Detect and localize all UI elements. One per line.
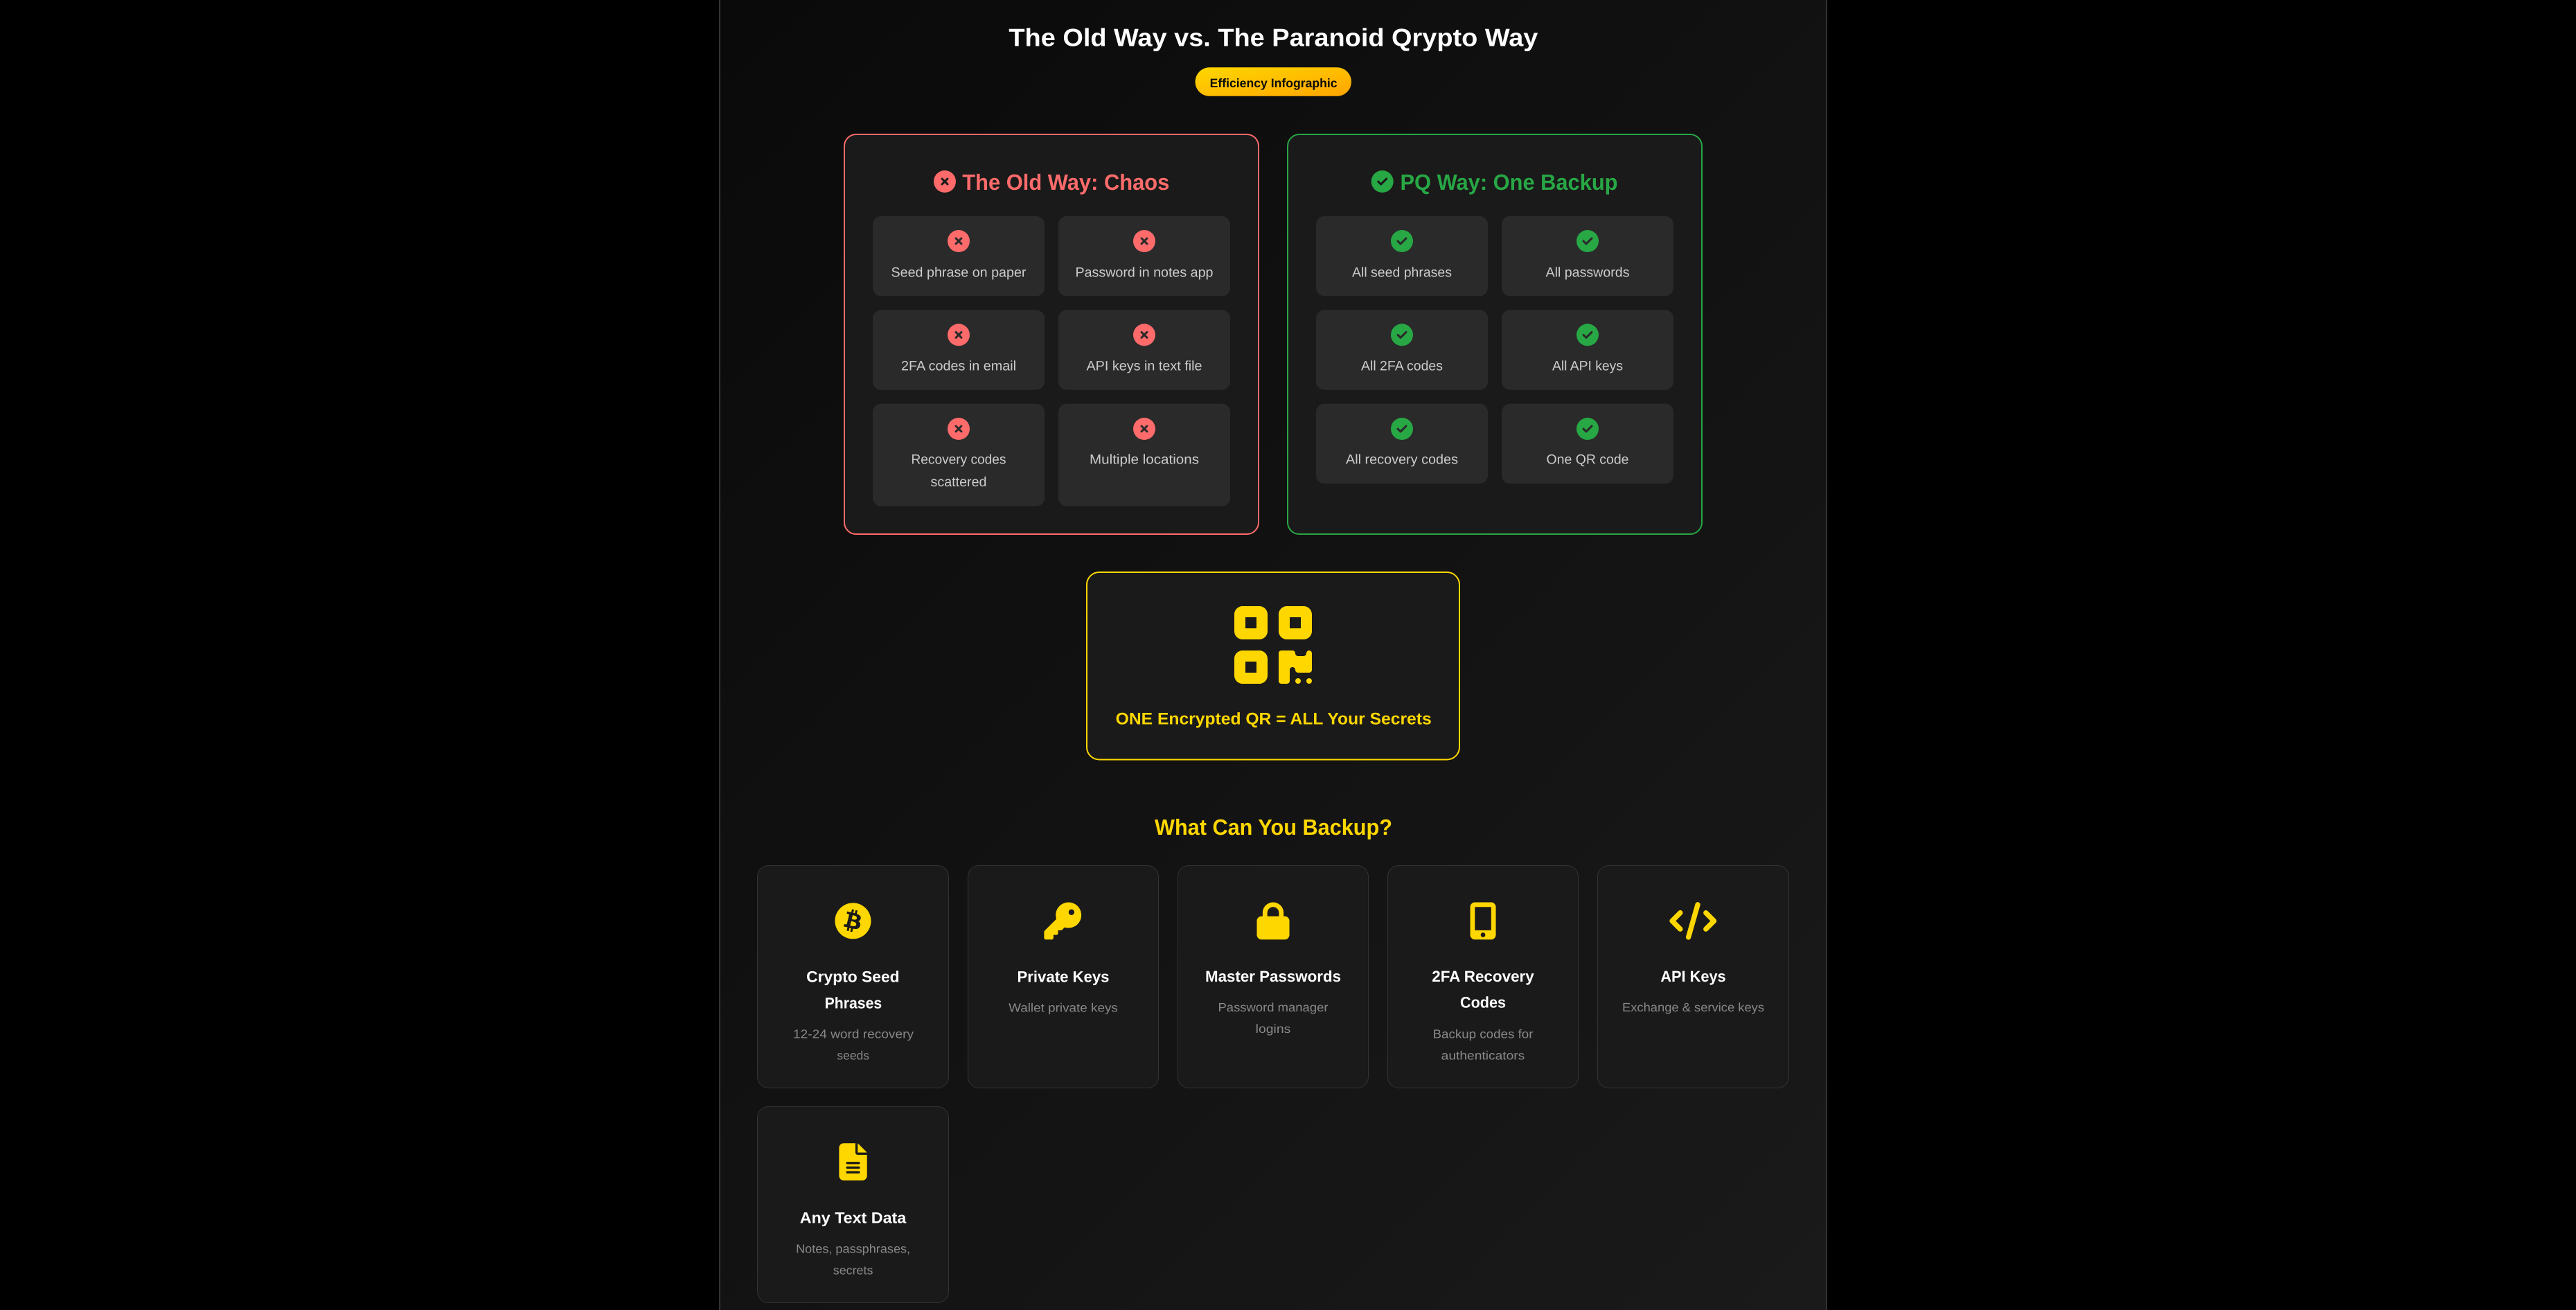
card description: Exchange & service keys bbox=[1622, 1000, 1764, 1014]
item: all 2fa codes bbox=[1316, 310, 1488, 390]
card title bbox=[1432, 968, 1534, 1011]
section heading: what can you backup: What Can You Backup? bbox=[1155, 815, 1392, 840]
item: all recovery codes: All recovery codes bbox=[1346, 452, 1458, 467]
card: crypto seed phrases bbox=[758, 866, 949, 1088]
item: all passwords: All passwords bbox=[1546, 265, 1630, 280]
card title: Any Text Data bbox=[800, 1209, 907, 1226]
card description bbox=[1218, 1000, 1329, 1036]
item: recovery codes scattered: scattered bbox=[931, 475, 986, 490]
item: one qr code bbox=[1502, 404, 1673, 484]
card description: 12-24 word recovery bbox=[793, 1027, 914, 1041]
card: 2fa recovery codes bbox=[1388, 866, 1578, 1088]
card description: Backup codes for bbox=[1432, 1027, 1534, 1041]
icon: code brackets bbox=[1670, 902, 1716, 939]
heading: the old way: The Old Way: Chaos bbox=[962, 170, 1169, 195]
card title bbox=[806, 968, 900, 1011]
card title: 2FA Recovery bbox=[1432, 968, 1534, 985]
card: api keys bbox=[1597, 866, 1788, 1088]
icon: bitcoin bbox=[835, 903, 871, 939]
card title: Codes bbox=[1460, 993, 1506, 1011]
item: all 2fa codes: All 2FA codes bbox=[1361, 358, 1443, 373]
card description bbox=[796, 1242, 910, 1277]
panel: pq way bbox=[1288, 134, 1702, 534]
item: all passwords bbox=[1502, 216, 1673, 296]
page background bbox=[719, 0, 1827, 1310]
card description: seeds bbox=[837, 1048, 869, 1062]
icon: mobile phone bbox=[1471, 902, 1496, 939]
card description bbox=[1432, 1027, 1534, 1062]
item: recovery codes scattered: Recovery codes bbox=[912, 452, 1006, 467]
item: all api keys bbox=[1502, 310, 1673, 390]
card description: secrets bbox=[833, 1264, 873, 1277]
card title: API Keys bbox=[1660, 968, 1726, 985]
item: one qr code: One QR code bbox=[1546, 452, 1629, 467]
icon: qr code bbox=[1234, 606, 1312, 684]
card description: Notes, passphrases, bbox=[796, 1242, 910, 1256]
badge: Efficiency Infographic bbox=[1196, 67, 1351, 96]
card title: Private Keys bbox=[1017, 968, 1110, 985]
heading: pq way: PQ Way: One Backup bbox=[1401, 170, 1618, 195]
badge: Efficiency Infographic: Efficiency Infographic bbox=[1210, 76, 1338, 90]
item: seed phrase on paper bbox=[873, 216, 1045, 296]
card: master passwords bbox=[1178, 866, 1369, 1088]
item: all seed phrases: All seed phrases bbox=[1352, 265, 1452, 280]
item: api keys in text file bbox=[1058, 310, 1230, 390]
card description: Wallet private keys bbox=[1009, 1000, 1118, 1014]
item: multiple locations bbox=[1058, 404, 1230, 506]
card description: logins bbox=[1256, 1022, 1291, 1036]
item: recovery codes scattered bbox=[873, 404, 1045, 506]
item: seed phrase on paper: Seed phrase on paper bbox=[891, 265, 1027, 280]
item: all recovery codes bbox=[1316, 404, 1488, 484]
title: The Old Way vs. The Paranoid Qrypto Way bbox=[1009, 24, 1538, 52]
item: multiple locations: Multiple locations bbox=[1090, 452, 1199, 467]
icon: lock bbox=[1256, 902, 1290, 939]
item: password in notes app: Password in notes app bbox=[1075, 265, 1214, 280]
item: password in notes app bbox=[1058, 216, 1230, 296]
icon: heading check circle bbox=[1371, 170, 1394, 193]
card description: authenticators bbox=[1441, 1048, 1525, 1062]
icon: text file bbox=[839, 1143, 867, 1180]
item: 2fa codes in email: 2FA codes in email bbox=[901, 358, 1016, 373]
card title: Master Passwords bbox=[1205, 968, 1341, 985]
card: any text data bbox=[758, 1107, 949, 1302]
callout: one encrypted qr bbox=[1087, 572, 1459, 759]
panel: the old way bbox=[844, 134, 1259, 534]
icon: heading x circle bbox=[934, 170, 956, 193]
item: 2fa codes in email bbox=[873, 310, 1045, 390]
item: all seed phrases bbox=[1316, 216, 1488, 296]
card description: Password manager bbox=[1218, 1000, 1329, 1014]
item: all api keys: All API keys bbox=[1552, 358, 1623, 373]
card: private keys bbox=[968, 866, 1158, 1088]
card title: Phrases bbox=[825, 994, 882, 1011]
icon: key bbox=[1044, 902, 1081, 939]
card title: Crypto Seed bbox=[806, 968, 900, 985]
callout text: ONE Encrypted QR = ALL Your Secrets bbox=[1116, 710, 1432, 729]
card description bbox=[793, 1027, 914, 1062]
item: api keys in text file: API keys in text file bbox=[1086, 358, 1202, 373]
